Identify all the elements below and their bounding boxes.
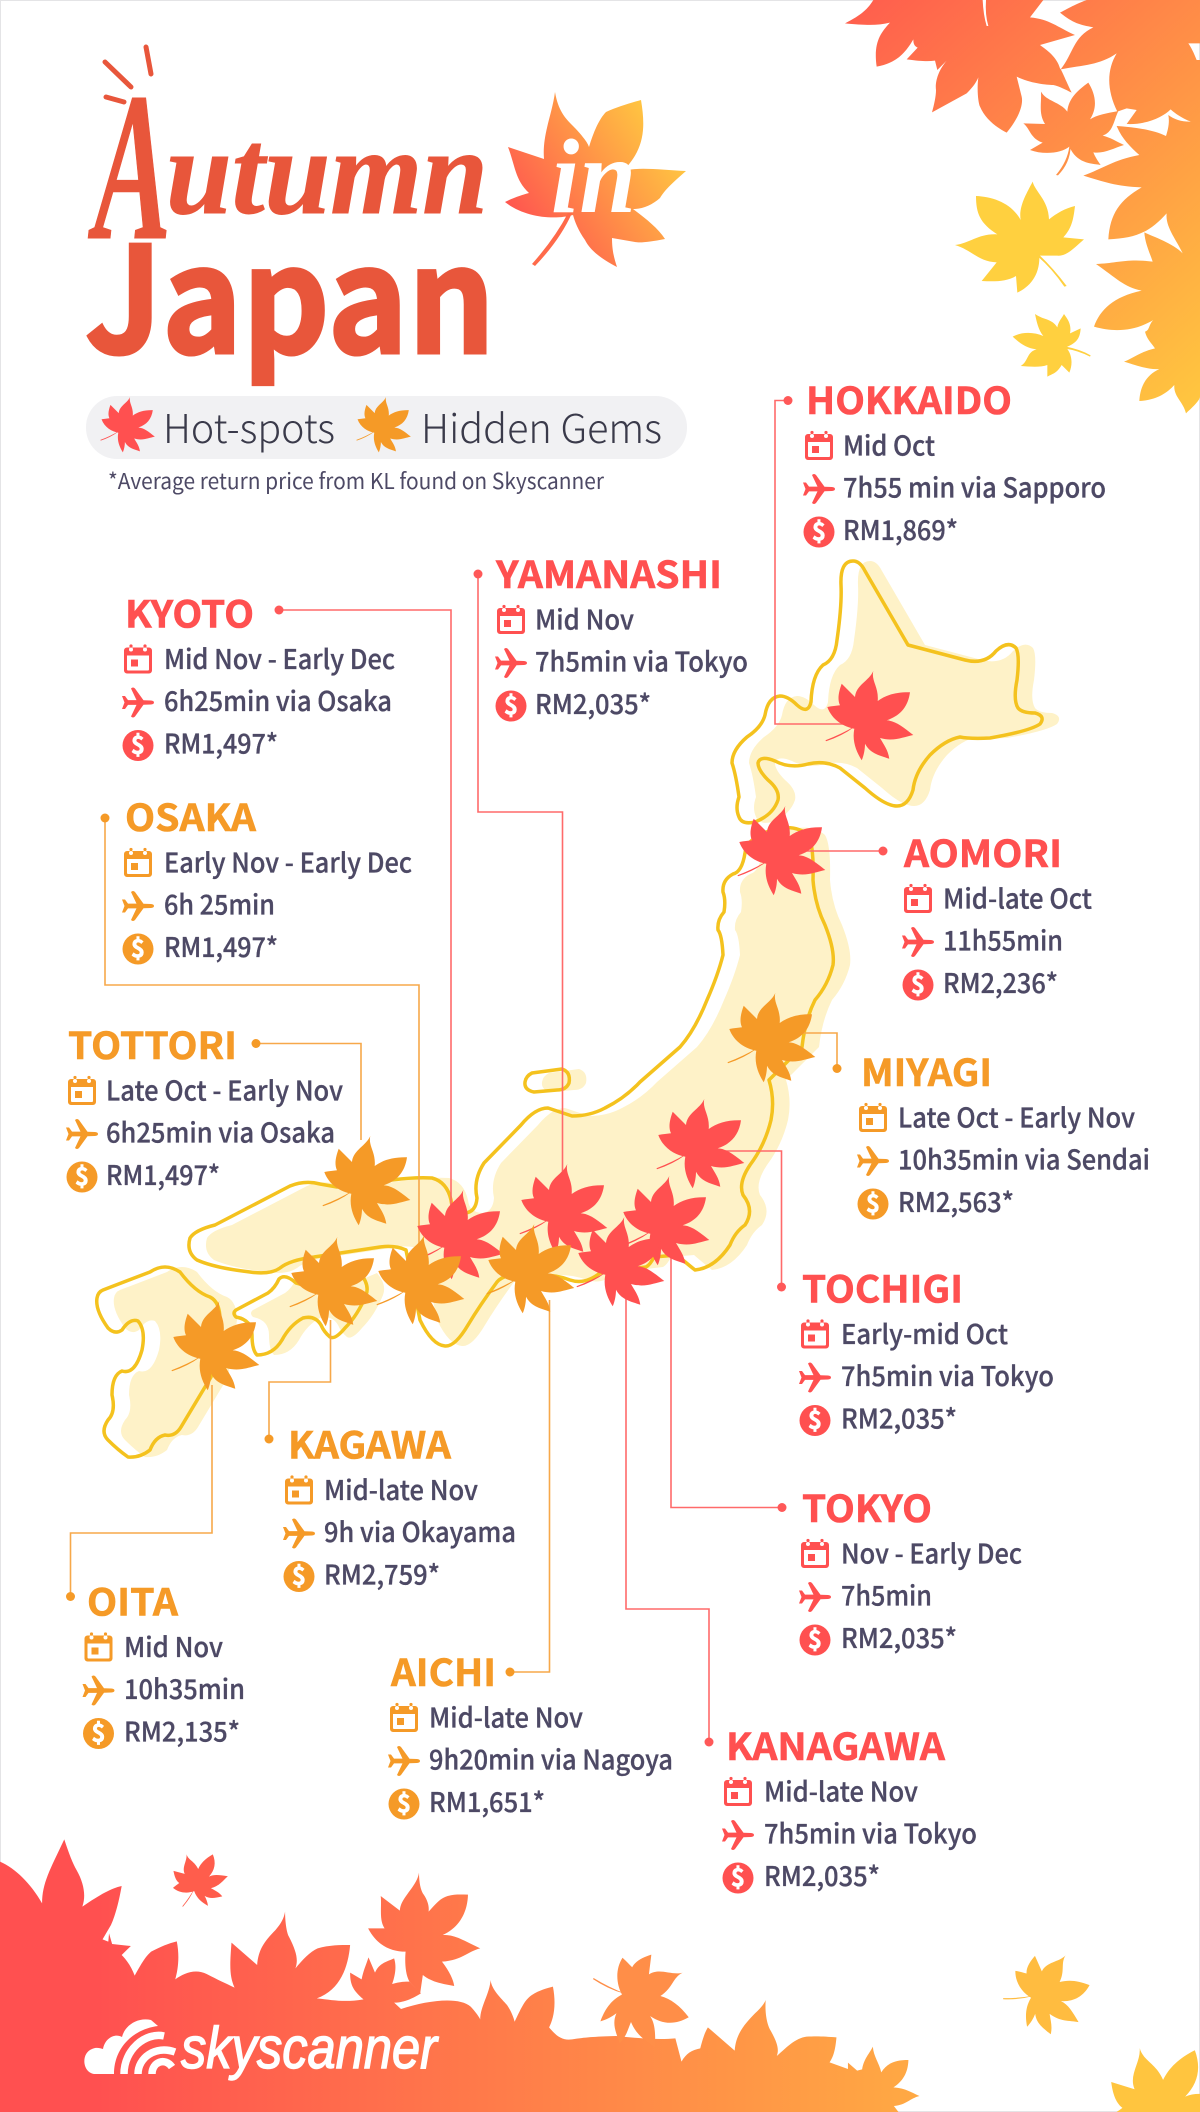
panel: Oita: $: [91, 1714, 106, 1748]
title: in on gradient leaf: [505, 92, 686, 267]
panel: Kagawa: Mid-late Nov: [324, 1469, 478, 1508]
panel: Miyagi: MIYAGI: [861, 1043, 992, 1097]
panel: Miyagi: [857, 1043, 1150, 1220]
panel: Kagawa: RM2,759*: [324, 1554, 440, 1592]
panel: Hokkaido: $: [812, 512, 826, 547]
panel: Kyoto: RM1,497*: [164, 722, 278, 762]
panel: Kyoto: [122, 584, 395, 762]
icon: hot-spot leaf: [100, 397, 155, 452]
panel: Yamanashi: [495, 545, 748, 722]
panel: Hokkaido: HOKKAIDO: [806, 371, 1012, 425]
panel: Kagawa: 9h via Okayama: [324, 1511, 516, 1550]
panel: Tokyo: 7h5min: [841, 1574, 932, 1614]
legend label: hot-spots: Hot-spots: [163, 397, 335, 455]
decorative leaf: bottom right corner: [1085, 2024, 1200, 2112]
panel: Tottori: 6h25min via Osaka: [106, 1112, 335, 1150]
panel: Miyagi: RM2,563*: [898, 1181, 1014, 1220]
title: Japan: Japan: [85, 183, 495, 396]
panel: Aichi: Mid-late Nov: [429, 1696, 583, 1736]
panel: Kanagawa: 7h5min via Tokyo: [764, 1812, 977, 1852]
panel: Tokyo: TOKYO: [802, 1479, 932, 1533]
decorative leaf: yellow large: [955, 182, 1084, 293]
panel: Kagawa: KAGAWA: [288, 1416, 451, 1470]
panel: Aomori: AOMORI: [903, 824, 1062, 878]
title: Autumn: [88, 49, 488, 284]
decorative leaf: yellow small: [1013, 314, 1091, 377]
decorative leaf: orange falling: [577, 1933, 709, 2064]
connector lines: [66, 396, 888, 1746]
panel: Yamanashi: RM2,035*: [535, 683, 651, 722]
panel: Oita: Mid Nov: [124, 1626, 223, 1665]
panel: Kagawa: $: [292, 1556, 306, 1592]
panel: Oita: 10h35min: [124, 1668, 245, 1707]
title decoration: accent strokes: [105, 47, 151, 102]
panel: Aichi: AICHI: [390, 1643, 496, 1697]
panel: Hokkaido: [803, 371, 1106, 548]
panel: Tottori: $: [75, 1157, 89, 1192]
panel: Kyoto: 6h25min via Osaka: [164, 680, 392, 719]
panel: Osaka: RM1,497*: [164, 926, 278, 965]
panel: Tottori: RM1,497*: [106, 1154, 220, 1193]
panel: Yamanashi: Mid Nov: [535, 598, 634, 638]
panel: Kanagawa: Mid-late Nov: [764, 1770, 918, 1810]
map markers: maple leaves: [172, 671, 913, 1390]
panel: Osaka: Early Nov - Early Dec: [164, 842, 412, 880]
footnote: *Average return price from KL found on Skyscanner: [108, 464, 604, 496]
panel: Tokyo: Nov - Early Dec: [841, 1532, 1022, 1572]
panel: Tochigi: Early-mid Oct: [841, 1313, 1008, 1352]
panel: Tokyo: [799, 1479, 1022, 1656]
logo wordmark: skyscanner: [181, 2016, 439, 2081]
logo: skyscanner: [84, 2016, 439, 2081]
panel: Kyoto: KYOTO: [125, 584, 254, 638]
panel: Aichi: [388, 1643, 673, 1820]
panel: Kyoto: Mid Nov - Early Dec: [164, 638, 395, 677]
panel: Miyagi: 10h35min via Sendai: [898, 1138, 1150, 1178]
panel: Kanagawa: KANAGAWA: [726, 1717, 945, 1771]
panel: Hokkaido: 7h55 min via Sapporo: [843, 466, 1106, 506]
panel: Aichi: RM1,651*: [429, 1781, 545, 1820]
panel: Miyagi: $: [866, 1184, 880, 1219]
panel: Tottori: Late Oct - Early Nov: [106, 1070, 343, 1108]
panel: Osaka: OSAKA: [125, 788, 256, 842]
title: Autumn: utumn: [166, 105, 488, 240]
panel: Kyoto: $: [131, 726, 145, 760]
panel: Aomori: 11h55min: [943, 920, 1063, 958]
panel: Yamanashi: 7h5min via Tokyo: [535, 640, 748, 680]
panel: Tochigi: $: [808, 1400, 822, 1436]
legend: [86, 396, 687, 459]
panel: Kanagawa: $: [731, 1858, 745, 1893]
panel: Tottori: [66, 1016, 343, 1193]
panel: Oita: OITA: [87, 1572, 178, 1626]
map: Japan cream fill: [114, 561, 1059, 1457]
panel: Yamanashi: $: [504, 686, 518, 721]
panel: Hokkaido: RM1,869*: [843, 509, 958, 548]
panel: Kanagawa: RM2,035*: [764, 1855, 880, 1894]
icon: hidden gem leaf: [356, 397, 411, 452]
decorative leaf: red small falling: [161, 1842, 236, 1917]
panel: Oita: [82, 1572, 245, 1750]
title: Autumn: A: [88, 49, 171, 284]
panel: Yamanashi: YAMANASHI: [495, 545, 722, 599]
panel: Kanagawa: [722, 1717, 977, 1894]
title: in on gradient leaf: in: [551, 118, 636, 235]
panel: Osaka: $: [131, 929, 145, 964]
panel: Kagawa: [283, 1416, 516, 1592]
panel: Tottori: TOTTORI: [68, 1016, 237, 1070]
icon: skyscanner cloud: [84, 2019, 175, 2074]
panel: Aichi: 9h20min via Nagoya: [429, 1738, 673, 1778]
panel: Tochigi: RM2,035*: [841, 1398, 957, 1436]
panel: Tochigi: 7h5min via Tokyo: [841, 1355, 1054, 1394]
panel: Miyagi: Late Oct - Early Nov: [898, 1096, 1135, 1136]
panel: Oita: RM2,135*: [124, 1710, 240, 1750]
panel: Aichi: $: [397, 1784, 411, 1819]
decorative leaf: amber falling: [997, 1940, 1099, 2043]
panel: Osaka: 6h 25min: [164, 884, 275, 922]
panel: Aomori: $: [911, 965, 925, 1000]
legend label: hidden gems: Hidden Gems: [421, 397, 662, 455]
decorative maple leaves: top right: [845, 0, 1200, 413]
panel: Hokkaido: Mid Oct: [843, 424, 935, 464]
panel: Tochigi: [799, 1260, 1054, 1436]
panel: Tochigi: TOCHIGI: [802, 1260, 963, 1314]
panel: Aomori: [902, 824, 1092, 1001]
panel: Tokyo: RM2,035*: [841, 1617, 957, 1656]
panel: Aomori: RM2,236*: [943, 962, 1058, 1001]
panel: Tokyo: $: [808, 1620, 822, 1655]
map: Japan outline: [97, 561, 1042, 1457]
panel: Osaka: [122, 788, 412, 965]
decorative leaves: bottom band: [0, 1839, 920, 2112]
panel: Aomori: Mid-late Oct: [943, 878, 1092, 916]
